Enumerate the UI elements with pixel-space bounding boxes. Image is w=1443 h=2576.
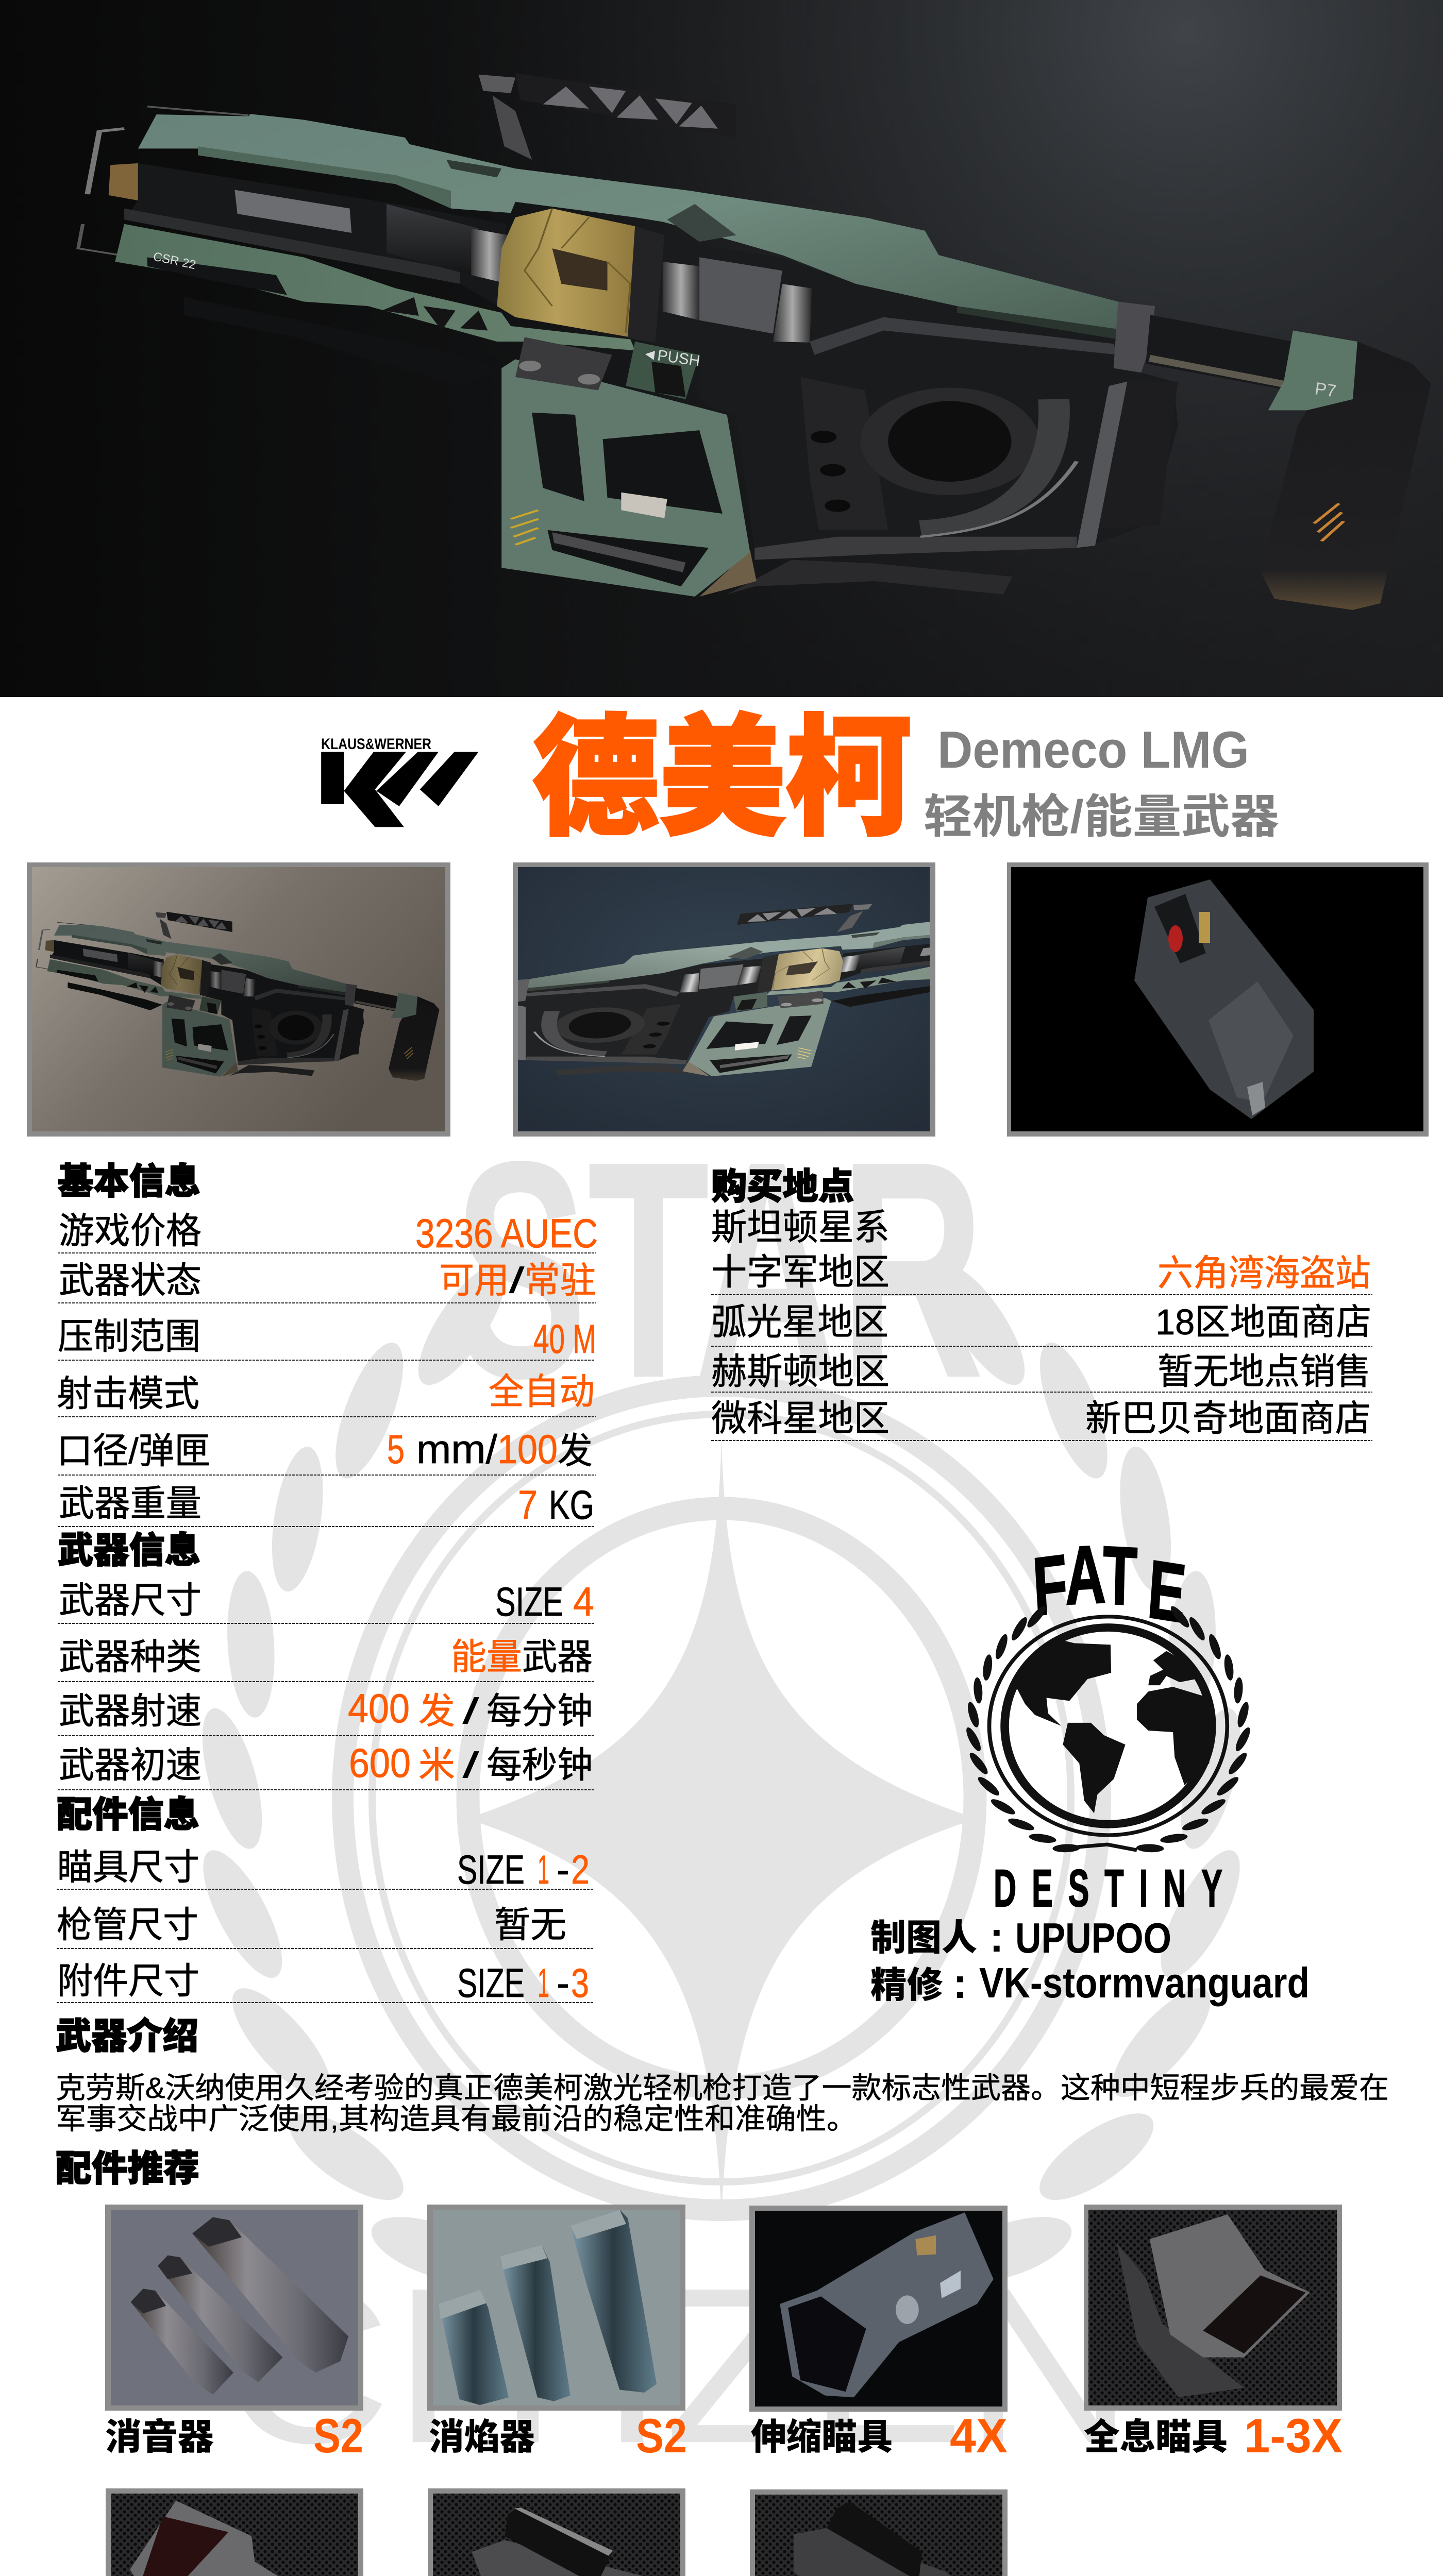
table: attachment info: SIZE: [457, 1846, 525, 1892]
table: attachment info: -: [557, 1960, 569, 2006]
table: purchase locations: 18区地面商店: [1155, 1302, 1371, 1342]
table: weapon info: SIZE: [495, 1579, 563, 1624]
table: basic info: 游戏价格: [59, 1211, 202, 1251]
hero panel: gun on dark background: [0, 0, 1443, 697]
credits: 制图人: [870, 1918, 977, 1958]
table: basic info: 武器状态: [59, 1260, 202, 1300]
table: weapon info: 武器种类: [59, 1637, 202, 1677]
background watermark: star citizen emblem: [189, 1097, 1254, 2489]
table: attachment info: -: [557, 1846, 569, 1892]
table: purchase locations: 暂无地点销售: [1157, 1351, 1371, 1392]
table: weapon info: 600: [349, 1740, 411, 1786]
hero gun markings: P7: [1314, 379, 1337, 401]
table: weapon info: 发: [418, 1691, 455, 1731]
label: 消音器: [105, 2417, 214, 2457]
credits: [870, 1913, 1310, 2007]
size tag: S2: [313, 2409, 363, 2463]
table: basic info: 射击模式: [57, 1374, 199, 1414]
table: weapon info: 400: [348, 1685, 410, 1731]
text block: weapon description: 克劳斯&沃纳使用久经考验的真正德美柯激光轻机枪打造了一款标志性武器。这种中短程步兵的最爱在: [56, 2072, 1389, 2105]
attachment: holographic sight: [1084, 2205, 1343, 2463]
hero gun markings: [152, 249, 1337, 401]
table: basic info: 可用: [439, 1260, 509, 1300]
table: purchase locations: 微科星地区: [711, 1398, 890, 1438]
brand logo: Klaus & Werner: [321, 736, 478, 827]
english subtitle: Demeco LMG: [937, 721, 1249, 779]
photo: battery magazine: [1007, 862, 1429, 1137]
background watermark: star citizen emblem: STAR: [454, 1097, 984, 1443]
attachment: flashlight: [750, 2489, 1008, 2576]
heading: 配件推荐: 配件推荐: [56, 2148, 199, 2189]
table: basic info: 100: [497, 1426, 558, 1472]
table: basic info: 口径/弹匣: [57, 1431, 210, 1471]
table: basic info: KG: [549, 1482, 594, 1528]
table: weapon info: 武器射速: [59, 1691, 202, 1731]
table: purchase locations: 新巴贝奇地面商店: [1085, 1398, 1371, 1438]
credits: VK-stormvanguard: [979, 1959, 1310, 2007]
table: basic info: 常驻: [524, 1260, 596, 1300]
heading: 武器信息: 武器信息: [58, 1530, 200, 1570]
table: attachment info: 1: [538, 1846, 549, 1892]
table: attachment info: 暂无: [494, 1905, 566, 1945]
text block: weapon description: 军事交战中广泛使用,其构造具有最前沿的稳定性和准确性。: [56, 2103, 857, 2136]
hero gun markings: ◄PUSH: [641, 345, 701, 370]
table: weapon info: /: [463, 1745, 479, 1785]
table: attachment info: [57, 1794, 594, 2006]
table: basic info: 发: [558, 1431, 593, 1471]
table: purchase locations: 弧光星地区: [711, 1302, 888, 1342]
brand logo: Klaus & Werner: KLAUS&WERNER: [321, 736, 431, 753]
logo: Fate Destiny emblem: FATE: [1030, 1528, 1189, 1640]
table: attachment info: 2: [571, 1846, 590, 1892]
logo: Fate Destiny emblem: [964, 1528, 1253, 1918]
size tag: S2: [636, 2409, 687, 2463]
table: weapon info: 武器尺寸: [59, 1580, 202, 1620]
table: basic info: 全自动: [489, 1371, 595, 1412]
table: weapon info: 4: [573, 1579, 594, 1624]
table: attachment info: 1: [538, 1960, 549, 2006]
text block: weapon description: [56, 2072, 1389, 2136]
title: 德美柯: [532, 706, 912, 851]
table: attachment info: 附件尺寸: [57, 1961, 199, 2001]
table: attachment info: 3: [571, 1960, 589, 2006]
label: 伸缩瞄具: [751, 2417, 893, 2457]
table: weapon info: 米: [418, 1745, 455, 1785]
table: purchase locations: 十字军地区: [711, 1252, 890, 1292]
size tag: 4X: [950, 2409, 1008, 2463]
table: basic info: 武器重量: [59, 1483, 202, 1523]
table: purchase locations: 斯坦顿星系: [711, 1207, 890, 1247]
credits: :: [953, 1959, 967, 2007]
table: weapon info: /: [463, 1691, 479, 1731]
table: purchase locations: 赫斯顿地区: [711, 1351, 890, 1392]
hero gun markings: CSR 22: [152, 249, 197, 272]
table: attachment info: 枪管尺寸: [57, 1905, 198, 1945]
credits: 精修: [870, 1965, 943, 2005]
table: basic info: 5: [387, 1426, 405, 1472]
label: 消焰器: [429, 2417, 535, 2457]
logo: Fate Destiny emblem: DESTINY: [994, 1859, 1222, 1918]
table: basic info: /: [509, 1260, 525, 1300]
table: weapon info: 武器: [522, 1637, 593, 1677]
label: 全息瞄具: [1084, 2417, 1228, 2457]
attachment: telescopic sight: [749, 2206, 1008, 2463]
photo: gun on slate background: [513, 862, 935, 1137]
attachment: flash hider: [427, 2205, 687, 2463]
table: weapon info: [58, 1530, 595, 1790]
attachment: laser: [428, 2488, 687, 2576]
table: basic info: [57, 1161, 598, 1528]
table: purchase locations: [711, 1166, 1372, 1440]
heading: 配件信息: 配件信息: [57, 1794, 199, 1835]
table: weapon info: 武器初速: [59, 1745, 202, 1785]
table: attachment info: 瞄具尺寸: [57, 1847, 199, 1887]
table: weapon info: 每秒钟: [486, 1745, 593, 1785]
credits: :: [989, 1913, 1004, 1961]
heading: 基本信息: 基本信息: [58, 1161, 200, 1201]
attachment: suppressor: [105, 2205, 363, 2463]
category subtitle: 轻机枪/能量武器: [924, 791, 1279, 843]
table: basic info: 7: [518, 1482, 538, 1528]
table: weapon info: 能量: [451, 1637, 522, 1677]
heading: 武器介绍: 武器介绍: [56, 2016, 198, 2056]
table: basic info: 3236 AUEC: [415, 1210, 598, 1256]
table: basic info: 40 M: [533, 1316, 596, 1362]
credits: UPUPOO: [1015, 1914, 1171, 1962]
photo: gun on grey wall: [27, 862, 450, 1137]
background watermark: star citizen emblem: CITIZEN: [222, 2242, 1134, 2489]
table: weapon info: 每分钟: [486, 1691, 593, 1731]
size tag: 1-3X: [1244, 2409, 1343, 2463]
table: basic info: mm/: [416, 1426, 497, 1472]
attachment: reflex sight: [106, 2488, 363, 2576]
table: basic info: 压制范围: [58, 1316, 200, 1357]
heading: 购买地点: 购买地点: [711, 1166, 854, 1207]
table: purchase locations: 六角湾海盗站: [1157, 1253, 1371, 1293]
table: attachment info: SIZE: [457, 1960, 525, 2006]
